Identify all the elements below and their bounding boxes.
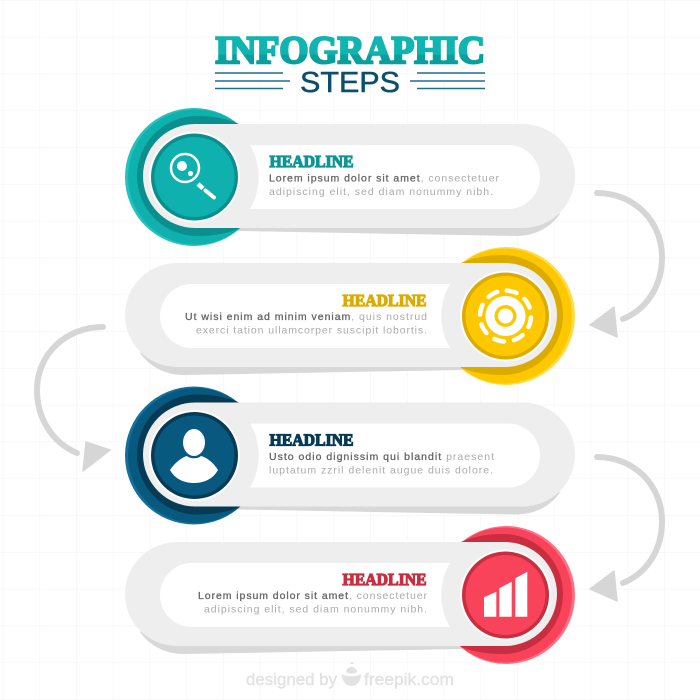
text block 2 (185, 311, 427, 336)
title (215, 29, 485, 99)
icon: gear (479, 289, 532, 343)
icon: freepik logo (342, 662, 361, 686)
text block 1 (269, 172, 500, 198)
icon: magnifying glass (171, 154, 214, 198)
headline 2: HEADLINE (342, 291, 426, 310)
text block 4: adipiscing elit, sed diam nonummy nibh. (204, 604, 427, 616)
text block 3: luptatum zzril delenit augue duis dolore. (269, 464, 493, 476)
text block 3: Usto odio dignissim qui blandit praesent (269, 451, 494, 463)
headline 3: HEADLINE (270, 430, 354, 450)
headline 1: HEADLINE (270, 152, 354, 171)
text block 2: exerci tation ullamcorper suscipit lobortis. (196, 324, 427, 336)
arrow: step 3 to step 4 (590, 457, 662, 601)
headline 4: HEADLINE (342, 570, 426, 589)
footer credit: designed by (246, 670, 337, 689)
heading: infographic: INFOGRAPHIC (215, 29, 485, 72)
text block 4 (198, 590, 428, 616)
heading: steps: STEPS (300, 67, 400, 99)
icon: person (170, 429, 218, 483)
panel: step 3 (125, 386, 575, 524)
footer credit (246, 662, 454, 689)
arrow: step 1 to step 2 (590, 193, 662, 337)
arrow: step 2 to step 3 (37, 327, 110, 471)
text block 1: adipiscing elit, sed diam nonummy nibh. (269, 186, 493, 198)
text block 2: Ut wisi enim ad minim veniam, quis nostrud (185, 311, 427, 323)
text block 4: Lorem ipsum dolor sit amet, consectetuer (198, 590, 428, 602)
footer credit: freepik.com (364, 670, 454, 689)
icon: bar chart (484, 572, 527, 617)
panel: step 1 (125, 108, 575, 246)
panel: step 2 (125, 247, 575, 385)
panel: step 4 (125, 526, 575, 664)
text block 3 (269, 451, 494, 476)
text block 1: Lorem ipsum dolor sit amet, consectetuer (269, 172, 500, 184)
